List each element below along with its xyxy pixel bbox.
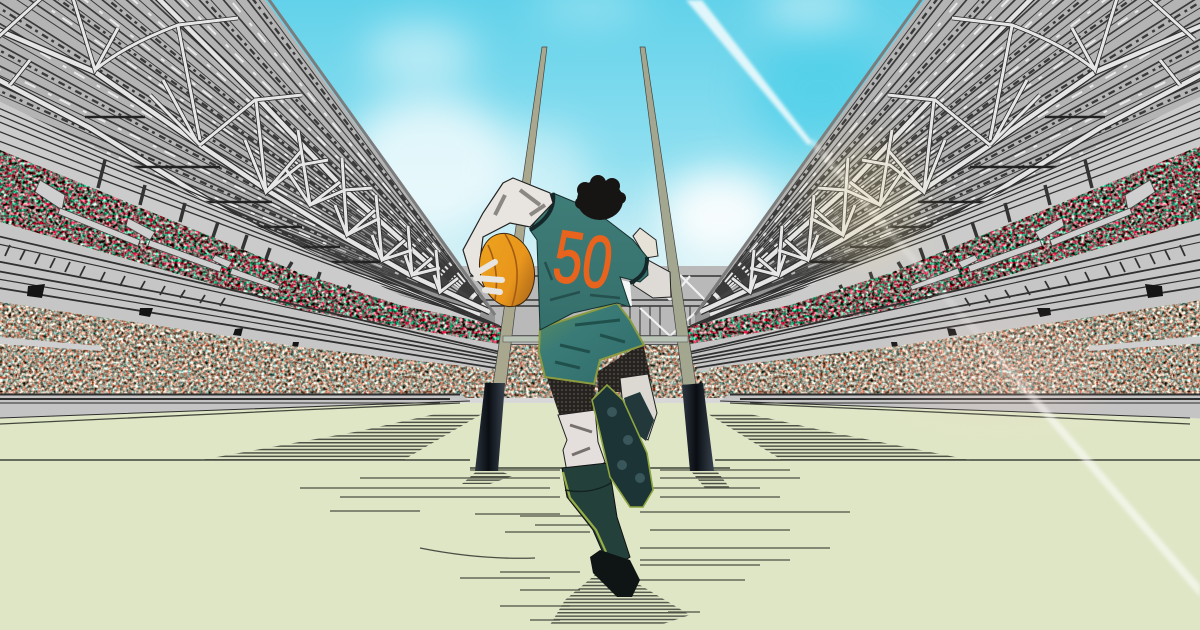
gap behind arm xyxy=(612,278,632,306)
raised lower leg xyxy=(624,392,654,441)
left goal post xyxy=(475,47,547,471)
left thigh xyxy=(545,372,596,417)
sock xyxy=(562,463,630,570)
right stand and roof xyxy=(680,0,1200,424)
left stand and roof xyxy=(0,0,510,424)
jersey number: 50 xyxy=(548,214,618,305)
ball xyxy=(473,228,541,312)
crossbar xyxy=(503,336,688,342)
supporting leg skin xyxy=(558,410,605,472)
planted boot xyxy=(590,550,640,597)
far arm xyxy=(633,260,671,298)
player xyxy=(463,175,671,597)
lens flare xyxy=(686,0,1200,597)
right goal post xyxy=(640,47,714,471)
field markings xyxy=(0,413,1200,625)
field xyxy=(0,395,1200,630)
sky xyxy=(240,0,960,320)
fingers xyxy=(476,262,502,292)
jersey xyxy=(530,193,648,330)
shorts xyxy=(539,303,644,384)
near arm xyxy=(463,178,553,297)
end stand behind the posts xyxy=(430,266,770,403)
head xyxy=(575,175,626,220)
bent knee xyxy=(620,374,657,440)
far hand xyxy=(633,228,658,258)
raised boot xyxy=(592,385,653,507)
right thigh xyxy=(597,343,651,392)
